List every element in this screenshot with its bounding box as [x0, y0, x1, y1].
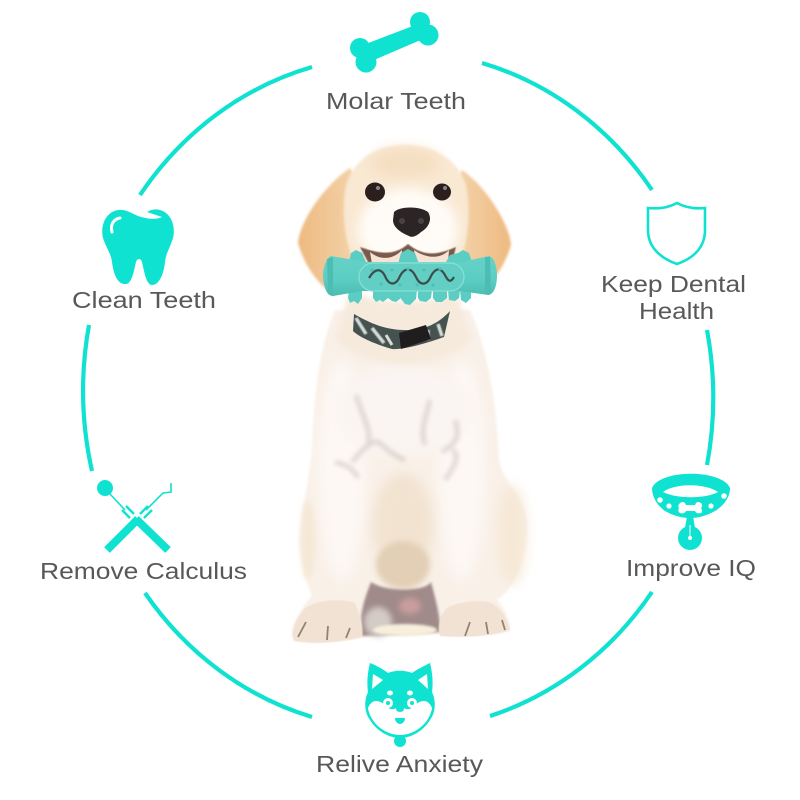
- item: Relive Anxiety: [316, 663, 484, 777]
- paws: [293, 600, 362, 643]
- icon: bone: [350, 12, 438, 72]
- icon: tooth highlight: [111, 218, 120, 232]
- chew toy: [323, 249, 497, 305]
- skull: [344, 145, 468, 290]
- icon: collar: [652, 474, 730, 550]
- item: Clean Teeth: [72, 209, 216, 313]
- puppy head: [298, 145, 511, 364]
- item: Remove Calculus: [40, 480, 247, 584]
- eyes: [365, 182, 385, 202]
- puppy body: [292, 310, 527, 643]
- belly shadow: [361, 582, 440, 636]
- label: Keep Dental Health: Keep Dental: [601, 271, 746, 297]
- icon: shield: [648, 203, 705, 264]
- item: Improve IQ: [626, 474, 756, 581]
- toy wave slot: [369, 269, 454, 284]
- collar: [353, 311, 450, 349]
- label: Remove Calculus: Remove Calculus: [40, 558, 247, 584]
- chest fur shadows: [335, 395, 457, 480]
- neck fur: [335, 290, 472, 364]
- icon: shiba face: [365, 663, 435, 747]
- ring of arcs: [83, 63, 713, 717]
- nose: [393, 208, 430, 237]
- ears: [298, 168, 365, 290]
- icon: dental tools: [97, 480, 171, 550]
- icon: tooth: [102, 209, 174, 285]
- item: Keep Dental Health: [601, 203, 752, 324]
- label: Keep Dental Health: Health: [639, 298, 714, 324]
- puppy photo illustration: [292, 145, 527, 643]
- label: Clean Teeth: Clean Teeth: [72, 287, 216, 313]
- mouth: [360, 244, 456, 265]
- item: Molar Teeth: [326, 12, 466, 114]
- toy spikes: [348, 249, 472, 305]
- collar stars: [657, 493, 727, 509]
- label: Improve IQ: Improve IQ: [626, 555, 756, 581]
- toy studs: [370, 267, 442, 287]
- label: Relive Anxiety: Relive Anxiety: [316, 751, 484, 777]
- label: Molar Teeth: Molar Teeth: [326, 88, 466, 114]
